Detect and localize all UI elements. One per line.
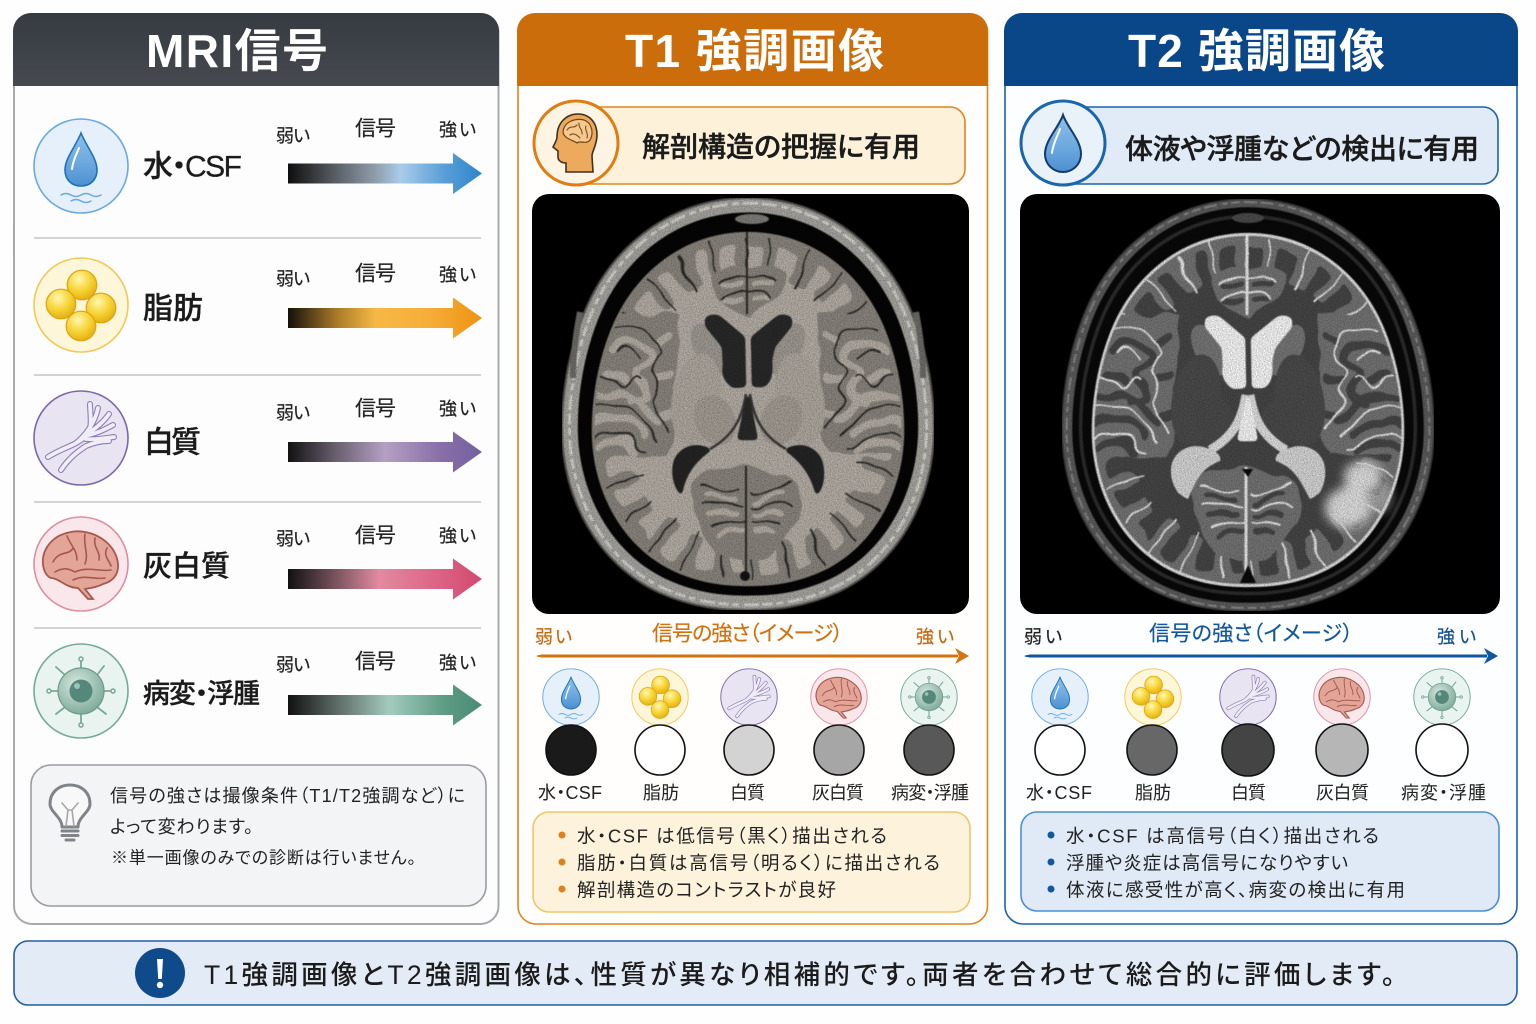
- signal labels: 弱い: [276, 269, 310, 289]
- T1 MRI scan: [532, 194, 969, 614]
- T2 notes: 体液に感受性が高く、病変の検出に有用: [1066, 880, 1405, 900]
- signal labels: 信号: [355, 650, 396, 674]
- banner text: T1強調画像とT2強調画像は、性質が異なり相補的です。両者を合わせて総合的に評価します。: [204, 960, 1395, 990]
- row: 病変・浮腫: [34, 644, 482, 738]
- T2 tissue swatches: [1026, 669, 1486, 803]
- heading text: T1 強調画像: [625, 25, 884, 77]
- signal labels: [276, 398, 476, 423]
- icon: water drop: [1021, 101, 1105, 185]
- panel: MRI信号: [13, 13, 499, 924]
- icon: water drop: [34, 119, 128, 213]
- row: 灰白質: [34, 517, 482, 611]
- T1 tissue swatches: 脂肪: [643, 783, 679, 803]
- signal labels: 強い: [439, 265, 476, 285]
- heading bar: T1: [517, 13, 988, 86]
- T1 tissue swatches: 白質: [730, 783, 765, 803]
- subtitle box: [534, 101, 965, 185]
- label: 病変・浮腫: [143, 679, 260, 709]
- T2 tissue swatches: 水・CSF: [1026, 783, 1092, 803]
- T2 notes: [1021, 812, 1499, 911]
- signal labels: 信号: [355, 524, 396, 548]
- signal labels: 信号: [355, 262, 396, 286]
- T2 tissue swatches: 脂肪: [1135, 783, 1171, 803]
- signal labels: [276, 262, 476, 289]
- T2 signal scale: [1024, 622, 1498, 664]
- heading text: T2 強調画像: [1128, 25, 1385, 77]
- heading bar: MRI信号: [13, 13, 499, 86]
- icon: head with brain: [534, 101, 618, 185]
- callout: tip: [31, 765, 486, 906]
- T1 signal scale: [535, 622, 969, 664]
- T1 notes: [533, 812, 970, 912]
- T1 notes: 水・CSF は低信号（黒く）描出される: [577, 826, 887, 846]
- panel: T1強調画像: [517, 13, 988, 924]
- signal labels: 強い: [439, 120, 476, 140]
- tip text: 信号の強さは撮像条件（T1/T2強調など）に: [110, 786, 465, 806]
- T2 signal scale: 弱い: [1024, 627, 1062, 647]
- signal labels: 強い: [439, 653, 476, 673]
- row dividers: [34, 238, 481, 628]
- row: 水・CSF: [34, 118, 482, 213]
- signal labels: 信号: [355, 398, 396, 420]
- icon: fat globules: [34, 258, 128, 352]
- row: 脂肪: [34, 258, 482, 352]
- T2 signal scale: 強い: [1437, 627, 1476, 647]
- T2 notes: 浮腫や炎症は高信号になりやすい: [1066, 852, 1348, 874]
- signal labels: [276, 650, 476, 675]
- T1 tissue swatches: 病変・浮腫: [891, 783, 969, 803]
- icon: white matter fibers: [34, 391, 128, 485]
- signal labels: [276, 118, 476, 146]
- row: 白質: [34, 391, 482, 485]
- panel: T2強調画像: [1004, 13, 1518, 924]
- T1 signal scale: 強い: [916, 627, 954, 647]
- T1 signal scale: 信号の強さ（イメージ）: [652, 622, 843, 646]
- signal arrow: [288, 558, 482, 600]
- signal labels: 強い: [439, 399, 476, 419]
- signal arrow: [288, 432, 482, 472]
- T2 tissue swatches: 白質: [1231, 783, 1266, 803]
- subtitle box: [1021, 101, 1498, 185]
- T2 notes: 水・CSF は高信号（白く）描出される: [1066, 826, 1379, 846]
- T1 notes: 解剖構造のコントラストが良好: [577, 880, 836, 900]
- T2 tissue swatches: 灰白質: [1316, 783, 1369, 803]
- bottom banner: [14, 941, 1517, 1005]
- label: 灰白質: [143, 550, 230, 583]
- icon: light bulb: [50, 785, 90, 840]
- subtitle text: 解剖構造の把握に有用: [642, 132, 920, 162]
- icon: brain: [34, 517, 128, 611]
- signal labels: 弱い: [276, 655, 310, 675]
- signal labels: [276, 524, 476, 549]
- subtitle text: 体液や浮腫などの検出に有用: [1125, 134, 1479, 164]
- signal labels: 弱い: [276, 126, 310, 146]
- T1 tissue swatches: 灰白質: [812, 783, 864, 803]
- signal labels: 強い: [439, 526, 476, 546]
- signal labels: 弱い: [276, 403, 310, 423]
- heading bar: T2: [1004, 13, 1518, 86]
- label: 水・CSF: [143, 150, 242, 184]
- heading text: MRI信号: [146, 25, 328, 77]
- T1 tissue swatches: [538, 669, 969, 803]
- icon: exclamation: [135, 948, 185, 998]
- label: 脂肪: [143, 292, 203, 326]
- T1 notes: 脂肪・白質は高信号（明るく）に描出される: [577, 852, 940, 874]
- T1 signal scale: 弱い: [535, 627, 572, 647]
- label: 白質: [144, 426, 201, 460]
- T2 tissue swatches: 病変・浮腫: [1401, 783, 1486, 803]
- signal arrow: [288, 153, 482, 194]
- tip text: よって変わります。: [110, 817, 253, 837]
- signal labels: 弱い: [276, 529, 310, 549]
- T1 tissue swatches: 水・CSF: [538, 783, 602, 803]
- signal labels: 信号: [355, 118, 396, 140]
- signal arrow: [288, 684, 482, 726]
- T2 signal scale: 信号の強さ（イメージ）: [1149, 622, 1353, 646]
- T2 MRI scan: [1020, 194, 1500, 614]
- tip text: [110, 786, 465, 868]
- tip text: ※単一画像のみでの診断は行いません。: [111, 848, 416, 868]
- signal arrow: [288, 298, 482, 338]
- icon: lesion cell: [34, 644, 128, 738]
